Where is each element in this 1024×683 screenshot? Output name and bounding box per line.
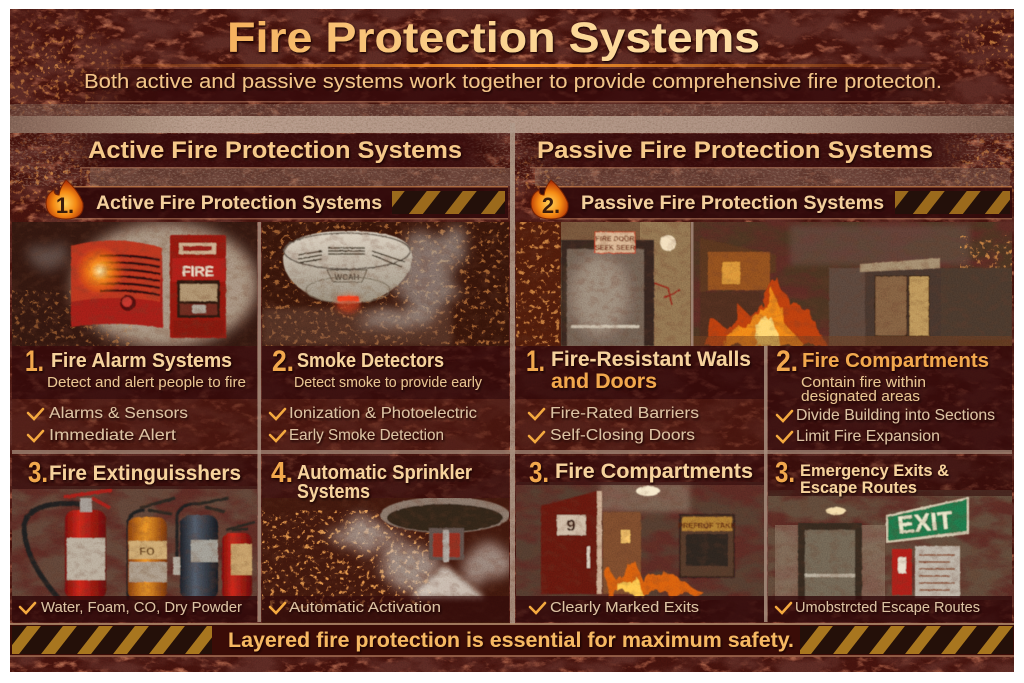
number: 3. bbox=[529, 457, 549, 489]
image: sprinkler bbox=[262, 497, 511, 624]
number: 1. bbox=[25, 345, 44, 378]
image: fire and compartments bbox=[693, 222, 1012, 346]
caption bbox=[12, 596, 257, 622]
checklist: Ionization & Photoelectric bbox=[289, 405, 477, 422]
panel: automatic sprinkler systems bbox=[262, 456, 509, 622]
column divider bbox=[510, 123, 515, 625]
icon: door: FIRE DOOR bbox=[596, 236, 634, 243]
panel: active sub-header bbox=[46, 180, 508, 220]
corridor with fire bbox=[603, 486, 660, 594]
hazard stripes bbox=[392, 191, 505, 214]
icon: flame 2 bbox=[531, 180, 568, 219]
panel: fire alarm systems bbox=[12, 345, 257, 452]
icon: smoke detector bbox=[283, 231, 412, 313]
icon: FIRE pull station: FIRE bbox=[182, 263, 214, 279]
heading: Systems bbox=[297, 481, 370, 503]
icon: exit door bbox=[798, 507, 862, 600]
image: fire extinguishers bbox=[12, 486, 257, 600]
heading: Automatic Sprinkler bbox=[297, 462, 472, 484]
heading: Fire Compartments bbox=[555, 460, 753, 483]
icon: evacuation notice bbox=[892, 546, 960, 598]
checklist: Divide Building into Sections bbox=[796, 407, 995, 424]
icon: EXIT sign bbox=[886, 497, 969, 543]
checklist: Self-Closing Doors bbox=[550, 427, 695, 444]
flames bbox=[705, 278, 825, 346]
icon: flame 1: 1. bbox=[56, 193, 74, 218]
heading: and Doors bbox=[551, 370, 657, 393]
smoke bbox=[360, 225, 470, 334]
icon: sprinkler head bbox=[380, 497, 510, 598]
hazard stripes bbox=[895, 191, 1010, 214]
row divider bbox=[12, 450, 1012, 454]
icon: door: SEEK SEER bbox=[595, 245, 635, 252]
footer message: Layered fire protection is essential for maximum safety. bbox=[228, 629, 794, 652]
panel: fire compartments lower bbox=[516, 456, 764, 622]
panel: smoke detectors bbox=[262, 345, 509, 452]
checklist bbox=[270, 405, 477, 444]
column dividers bbox=[258, 222, 768, 622]
heading: Fire Extinguisshers bbox=[49, 462, 241, 485]
panel: fire-resistant walls and doors bbox=[516, 345, 764, 452]
caption bbox=[262, 596, 509, 622]
icon: orange extinguisher: FO bbox=[139, 546, 155, 558]
number: 1. bbox=[526, 345, 545, 378]
description bbox=[801, 375, 926, 405]
subtitle: Both active and passive systems work together to provide comprehensive fire protecton. bbox=[84, 71, 942, 93]
image: emergency exit bbox=[768, 490, 1012, 600]
heading: Emergency Exits & bbox=[800, 461, 949, 480]
panel: fire extinguishers bbox=[12, 456, 257, 622]
number: 3. bbox=[775, 457, 795, 489]
icon: EXIT sign: EXIT bbox=[896, 506, 954, 540]
subheading: Active Fire Protection Systems bbox=[96, 193, 382, 214]
panel: active header bbox=[70, 134, 505, 168]
heading: active: Active Fire Protection Systems bbox=[88, 137, 462, 164]
icon: orange extinguisher bbox=[128, 498, 175, 600]
title banner bbox=[75, 14, 955, 102]
icon: door bbox=[561, 232, 680, 346]
icon: smoke detector: WCAH bbox=[335, 273, 360, 282]
heading: Fire Compartments bbox=[802, 350, 989, 372]
caption bbox=[516, 596, 764, 622]
heading: Smoke Detectors bbox=[297, 350, 444, 372]
heading: Fire Alarm Systems bbox=[51, 350, 232, 372]
icon: numbered door: 9 bbox=[566, 516, 576, 535]
number: 2. bbox=[272, 345, 294, 378]
image: smoke detector bbox=[262, 222, 509, 346]
footer banner bbox=[10, 623, 1014, 657]
description: Contain fire within bbox=[801, 375, 926, 391]
checklist bbox=[777, 407, 995, 445]
caption: Umobstrcted Escape Routes bbox=[795, 599, 980, 616]
checklist bbox=[529, 405, 699, 444]
icon: red extinguisher bbox=[24, 490, 112, 600]
panel: passive header bbox=[520, 134, 970, 168]
title: Fire Protection Systems bbox=[227, 14, 760, 62]
stone band bbox=[10, 104, 1014, 186]
caption: Clearly Marked Exits bbox=[550, 599, 699, 616]
caption bbox=[768, 596, 1012, 622]
image: fire compartment corridor bbox=[516, 482, 766, 600]
icon: flame 1 bbox=[46, 180, 83, 219]
number: 4. bbox=[271, 457, 293, 489]
checklist: Fire-Rated Barriers bbox=[550, 405, 699, 422]
panel: fire compartments bbox=[768, 345, 1012, 452]
heading: Fire-Resistant Walls bbox=[551, 348, 751, 371]
checklist: Immediate Alert bbox=[49, 427, 177, 444]
icon: small red extinguisher bbox=[222, 522, 255, 600]
checklist: Alarms & Sensors bbox=[49, 405, 188, 422]
window bbox=[700, 240, 776, 326]
checklist bbox=[28, 405, 188, 444]
icon: wall notice board bbox=[678, 515, 737, 577]
panel: emergency exits bbox=[768, 456, 1012, 622]
heading bbox=[800, 461, 949, 497]
hazard stripes right bbox=[800, 626, 1013, 654]
checklist: Limit Fire Expansion bbox=[796, 428, 940, 445]
subheading: Passive Fire Protection Systems bbox=[581, 193, 884, 214]
number: 3. bbox=[28, 457, 48, 489]
image: fire door bbox=[516, 222, 691, 346]
number: 2. bbox=[776, 345, 798, 378]
icon: wall notice board: PREFROF TAKK bbox=[678, 521, 737, 530]
caption: Water, Foam, CO, Dry Powder bbox=[41, 599, 242, 616]
heading bbox=[297, 462, 472, 503]
panel: passive sub-header bbox=[531, 180, 1012, 220]
icon: alarm bell box bbox=[71, 240, 163, 328]
description: Detect and alert people to fire bbox=[47, 374, 246, 391]
heading bbox=[551, 348, 751, 393]
icon: black extinguisher bbox=[173, 498, 229, 600]
heading: Escape Routes bbox=[800, 478, 917, 497]
icon: numbered door bbox=[541, 491, 602, 594]
hazard stripes left bbox=[12, 626, 212, 654]
icon: FIRE pull station bbox=[170, 235, 226, 338]
image: fire alarm and pull station bbox=[12, 222, 257, 347]
description: designated areas bbox=[801, 389, 920, 405]
checklist: Early Smoke Detection bbox=[289, 427, 444, 444]
description: Detect smoke to provide early bbox=[294, 374, 482, 391]
icon: building doors bbox=[829, 258, 1012, 346]
icon: flame 2: 2. bbox=[542, 193, 560, 218]
caption: Automatic Activation bbox=[289, 599, 441, 616]
heading: passive: Passive Fire Protection Systems bbox=[537, 137, 933, 164]
